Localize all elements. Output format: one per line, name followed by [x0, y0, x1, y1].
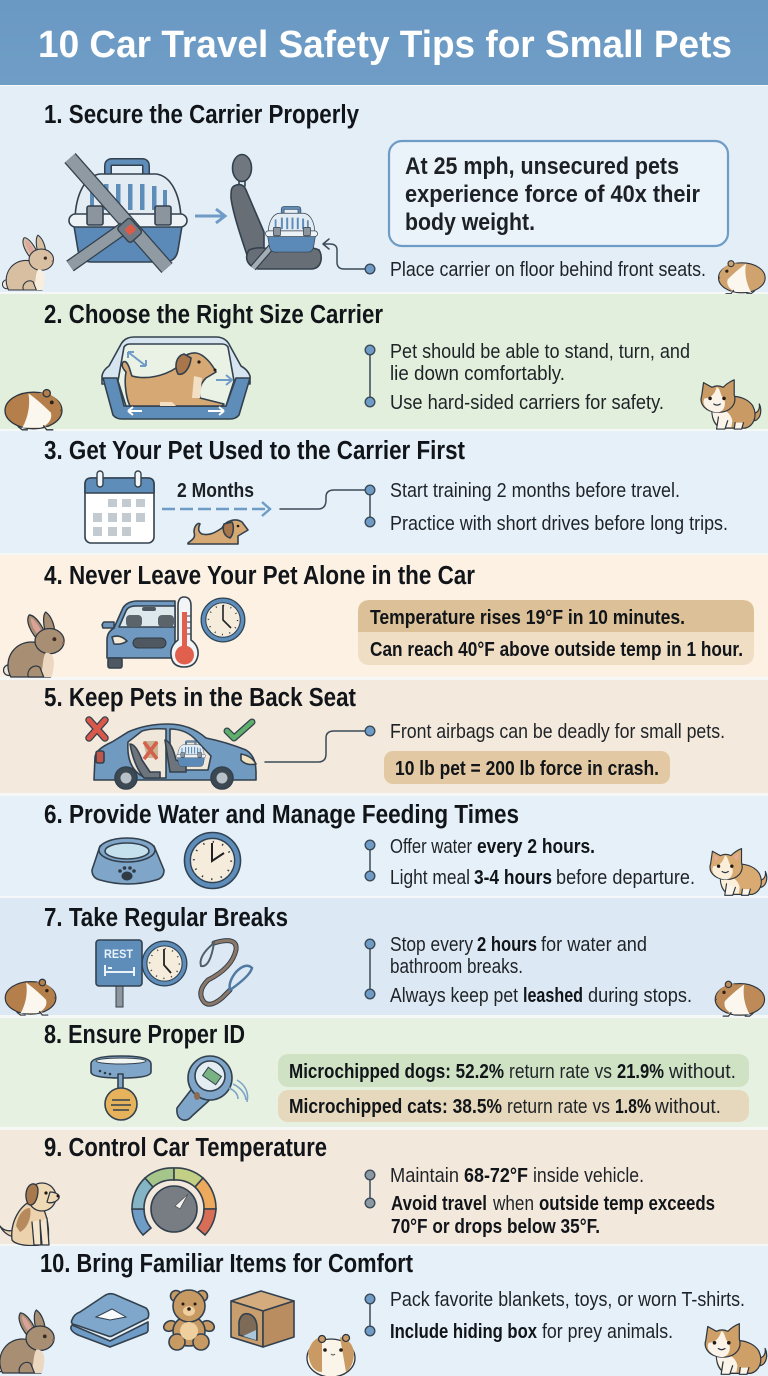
heading: 2. Choose the Right Size Carrier: [44, 301, 383, 329]
connector: [365, 1294, 375, 1336]
guinea pig: [5, 979, 56, 1015]
icon: rest sign: REST: [104, 947, 134, 961]
text: sizing: lie down comfortably.: [390, 363, 565, 385]
panel: 9 temperature: [0, 1130, 768, 1246]
stat pill: 10 lb pet = 200 lb force in crash.: [395, 758, 659, 780]
stat pill: cats: without.: [654, 1096, 721, 1118]
panel: 10 familiar items: [0, 1246, 768, 1376]
text: breaks: Always keep pet: [390, 985, 518, 1007]
stat pill: cats: return rate vs: [507, 1096, 610, 1118]
stat pill: dogs: [278, 1054, 749, 1087]
text: breaks: during stops.: [588, 985, 692, 1007]
panel: 6 water and feeding: [0, 796, 768, 896]
connector: [365, 345, 375, 407]
text: water: Offer water: [390, 836, 472, 858]
guinea pig: [715, 981, 765, 1016]
dog: [0, 1183, 60, 1246]
connector: [265, 726, 375, 762]
guinea pig: [5, 390, 62, 430]
icon: carrier with dog: [102, 337, 250, 419]
rabbit: [2, 235, 54, 290]
connector: [323, 239, 375, 274]
dog: [710, 849, 767, 895]
callout: force stat: experience force of 40x their: [405, 181, 700, 208]
connector: [365, 939, 375, 999]
icon: scanner: [177, 1056, 248, 1120]
text: placement: Place carrier on floor behind front seats.: [390, 259, 706, 281]
text: temperature: 70°F or drops below 35°F.: [391, 1216, 600, 1238]
text: water: Light meal: [390, 867, 470, 889]
panel: 2 right size carrier: [0, 294, 768, 430]
icon: hot car: [102, 601, 175, 668]
panel: 7 breaks: [0, 898, 768, 1016]
guinea pig: [718, 261, 765, 294]
icon: strapped carrier: [69, 158, 187, 268]
text: breaks: for water and: [541, 934, 647, 956]
heading: 9. Control Car Temperature: [44, 1134, 327, 1162]
stat pill: dogs: Microchipped dogs: 52.2%: [289, 1061, 504, 1083]
callout: force stat: body weight.: [405, 209, 535, 236]
heading: 6. Provide Water and Manage Feeding Times: [44, 801, 519, 829]
header banner: [0, 0, 768, 85]
stat pill: cats: [278, 1090, 749, 1122]
callout: force stat: At 25 mph, unsecured pets: [405, 153, 679, 180]
text: breaks: [390, 934, 692, 1007]
text: breaks: bathroom breaks.: [390, 956, 523, 978]
text: training: [390, 480, 728, 535]
connector: [280, 485, 375, 527]
heading: 1. Secure the Carrier Properly: [44, 101, 360, 129]
text: breaks: leashed: [523, 985, 583, 1007]
text: breaks: 2 hours: [477, 934, 537, 956]
callout: force stat: [389, 141, 728, 246]
stat pill: [384, 751, 670, 784]
stat pills: Temperature rises 19°F in 10 minutes.: [370, 607, 685, 629]
heading: 5. Keep Pets in the Back Seat: [44, 684, 356, 712]
icon: clock: [184, 832, 241, 889]
text: sizing: Pet should be able to stand, turn, and: [390, 341, 690, 363]
icon: side car: [94, 724, 256, 789]
connector: [365, 840, 375, 881]
text: training: Start training 2 months before travel.: [390, 480, 680, 502]
text: temperature: outside temp exceeds: [539, 1193, 715, 1215]
panel: 5 back seat: [0, 680, 768, 793]
stat pill: cats: Microchipped cats: 38.5%: [289, 1096, 502, 1118]
panel: 8 proper ID: [0, 1018, 768, 1127]
icon: car seat with carrier: [231, 154, 321, 269]
text: temperature: [390, 1165, 715, 1238]
rabbit: [0, 1310, 54, 1373]
text: temperature: 68-72°F: [464, 1165, 528, 1187]
title: 10 Car Travel Safety Tips for Small Pets: [38, 24, 732, 66]
icon: red x: [89, 720, 105, 738]
stat pill: dogs: return rate vs: [509, 1061, 612, 1083]
icon: leash: [201, 941, 252, 1004]
stat pill: dogs: without.: [668, 1061, 736, 1083]
stat pills: [358, 600, 754, 665]
icon: clock: [142, 941, 187, 986]
heading: 4. Never Leave Your Pet Alone in the Car: [44, 562, 475, 590]
panel: 3 training: [0, 431, 768, 553]
connector: [365, 1170, 375, 1208]
icon: hiding box: [231, 1291, 294, 1347]
text: training: Practice with short drives before long trips.: [390, 513, 728, 535]
text: breaks: Stop every: [390, 934, 473, 956]
text: sizing: [390, 341, 690, 414]
icon: blanket: [71, 1294, 149, 1347]
text: temperature: Avoid travel: [391, 1193, 487, 1215]
heading: 10. Bring Familiar Items for Comfort: [40, 1250, 413, 1278]
panel: 1 secure the carrier: [0, 86, 768, 294]
icon: temperature dial: [132, 1168, 216, 1235]
text: water: [390, 836, 695, 889]
arrow: dashed: [162, 502, 270, 516]
label: 2 months: 2 Months: [177, 480, 254, 502]
corgi: [701, 380, 761, 429]
icon: collar and tag: [91, 1056, 151, 1120]
icon: water bowl: [92, 838, 164, 884]
heading: 7. Take Regular Breaks: [44, 904, 288, 932]
icon: small dog: [188, 520, 248, 544]
corgi: [705, 1324, 767, 1374]
text: water: before departure.: [556, 867, 695, 889]
text: comfort: Include hiding box: [390, 1321, 537, 1343]
text: water: every 2 hours.: [477, 836, 595, 858]
panel: 4 never alone: [0, 555, 768, 677]
text: temperature: when: [492, 1193, 534, 1215]
text: comfort: [390, 1289, 745, 1343]
text: airbags: Front airbags can be deadly for small pets.: [390, 721, 725, 743]
text: temperature: Maintain: [390, 1165, 459, 1187]
text: sizing: Use hard-sided carriers for safety.: [390, 392, 664, 414]
icon: calendar: [85, 471, 154, 543]
arrow: [195, 209, 225, 223]
text: temperature: inside vehicle.: [533, 1165, 644, 1187]
stat pill: dogs: 21.9%: [617, 1061, 664, 1083]
text: water: 3-4 hours: [474, 867, 552, 889]
stat pill: cats: 1.8%: [615, 1096, 651, 1118]
icon: thermometer: [171, 597, 198, 667]
text: comfort: for prey animals.: [542, 1321, 673, 1343]
icon: rest sign: [96, 940, 142, 1007]
heading: 3. Get Your Pet Used to the Carrier First: [44, 437, 465, 465]
icon: green check: [227, 722, 252, 738]
icon: teddy bear: [162, 1290, 216, 1350]
icon: clock: [201, 598, 245, 642]
guinea pig: [307, 1334, 355, 1376]
rabbit: [3, 612, 64, 677]
heading: 8. Ensure Proper ID: [44, 1021, 245, 1049]
